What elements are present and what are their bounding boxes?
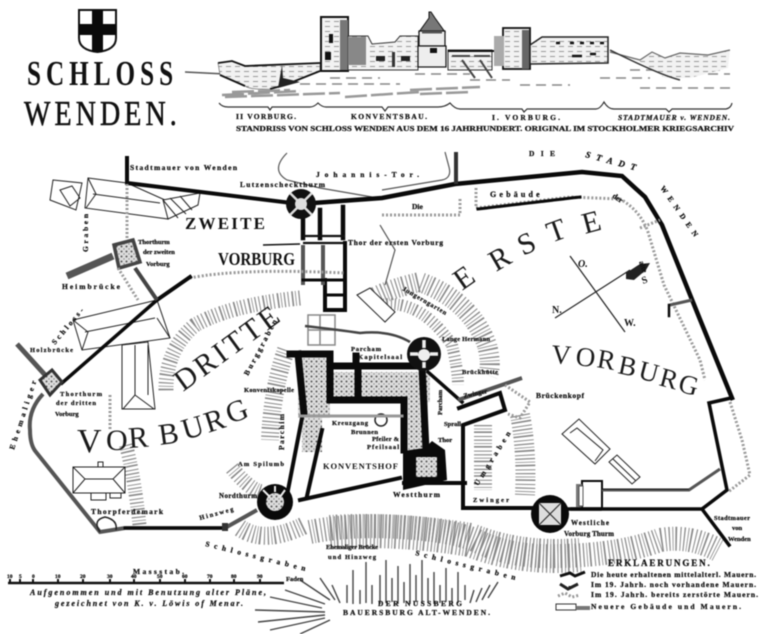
text block: map labels: Parcham — [437, 389, 444, 415]
text block: map labels — [7, 149, 751, 617]
castle west tower block — [403, 441, 447, 490]
title: WENDEN. — [24, 94, 177, 133]
text block: map labels: Schloss- — [50, 306, 86, 346]
icon: tower east — [531, 495, 569, 533]
panel: convent castle — [288, 326, 532, 508]
scale numbers: 90 — [257, 574, 263, 580]
heading: Vorburg right: V — [551, 339, 573, 370]
panel: third outer bailey wall — [17, 240, 257, 532]
icon: coat of arms shield — [79, 10, 116, 52]
text block: map labels: Zwinger — [473, 497, 509, 504]
castle fountain — [375, 414, 387, 426]
text block: map labels: Vorburg Thurm — [564, 530, 614, 538]
icon: tower south-west — [257, 484, 293, 520]
text block: map labels: Westthurm — [393, 490, 441, 499]
text block: map labels: Jungerngarten — [401, 286, 448, 317]
heading: Erste: E — [447, 259, 481, 297]
elevation gate tower — [494, 28, 530, 69]
elevation ground and hills — [185, 50, 730, 97]
elevation long curtain wall — [530, 37, 608, 64]
elevation connecting wall — [448, 50, 495, 78]
heading: Vorburg right: U — [635, 355, 662, 389]
scale numbers: 40 — [131, 574, 137, 580]
heading: Dritte: DRITTE — [168, 299, 286, 398]
heading: Vorburg left: R — [127, 421, 149, 455]
text block: map labels: Ehemaliger — [7, 379, 38, 451]
heading: Erste: R — [483, 239, 517, 278]
building: east house — [562, 419, 610, 464]
heading: Vorburg left: V — [77, 423, 102, 460]
text block: map labels: Konventskapelle — [244, 387, 294, 394]
text block: map labels: Thorpferdemark — [91, 507, 164, 516]
text block: map labels: Hinzweg — [199, 506, 235, 522]
wall south-east spur — [569, 507, 600, 511]
text block: map labels: Pfeiler & — [372, 436, 400, 443]
panel: outer town wall — [127, 152, 750, 545]
text block: map labels: Westliche — [571, 519, 609, 527]
panel: buildings — [50, 178, 640, 507]
text block: map labels: Kreuzgang — [332, 420, 369, 427]
scale numbers: 80 — [231, 574, 237, 580]
scale numbers: 5 — [19, 574, 22, 580]
heading: Erste — [447, 204, 605, 297]
scale numbers: 50 — [157, 574, 163, 580]
legend title: ERKLAERUNGEN. — [608, 558, 710, 568]
text block: map labels: der — [611, 191, 625, 205]
heading: Vorburg left: U — [178, 409, 208, 447]
text block: map labels: WENDEN — [658, 184, 700, 239]
icon: tower north-east — [407, 337, 441, 371]
heading: Vorburg left: O — [106, 424, 128, 457]
text block: map labels: Graben — [81, 213, 90, 252]
scale numbers: 10 — [55, 574, 61, 580]
building: vertical roof — [122, 342, 155, 409]
panel: scale bar — [7, 567, 304, 583]
icon: compass rose: S — [640, 274, 650, 287]
text block: map labels: Brückhütte — [462, 369, 498, 376]
text block: map labels: Sprall- — [444, 421, 463, 428]
heading: Erste: E — [578, 204, 605, 241]
text block: map labels: Heimbrücke — [62, 282, 121, 291]
icon: compass rose: N. — [552, 305, 562, 316]
panel: scale bar: Massstab. — [133, 567, 184, 576]
text block: map labels: Stadtmauer — [714, 515, 750, 522]
title — [24, 54, 177, 133]
heading: Vorburg right: B — [616, 350, 640, 383]
castle west walls — [288, 416, 465, 500]
hachures: Nussberg fan — [255, 578, 340, 634]
text block: map labels: Brückenkopf — [536, 391, 584, 400]
text block: map labels: Thorthurm — [138, 239, 170, 246]
heading: Vorburg right — [551, 339, 702, 402]
scale numbers: 20 — [80, 574, 86, 580]
scale numbers: 70 — [207, 574, 213, 580]
heading: Vorburg left: G — [221, 392, 253, 431]
text block: map labels: DER NUSSBERG — [378, 599, 462, 608]
building: east gate block — [576, 481, 602, 507]
heading: Vorburg right: G — [675, 368, 702, 402]
legend row: destroyed walls: Im 19. Jahrh. bereits zerstörte Mauern. — [591, 590, 758, 599]
heading: Vorburg left: R — [200, 402, 229, 440]
icon: compass rose — [552, 256, 650, 332]
text block: map labels: Umgraben — [472, 429, 513, 487]
panel: castle elevation view — [185, 12, 735, 133]
text block: map labels: Ehemaliger Brücke — [326, 544, 378, 551]
panel: legend — [556, 558, 758, 611]
heading: Vorburg upper: VORBURG — [218, 249, 295, 269]
scale numbers: 0 — [32, 574, 35, 580]
panel: gate structure second outer bailey — [190, 207, 395, 345]
elevation section labels: STADTMAUER v. WENDEN. — [618, 113, 730, 122]
elevation section labels: KONVENTSBAU. — [351, 112, 427, 121]
castle east outworks — [428, 372, 532, 508]
text block: map labels: Parcham — [351, 346, 382, 353]
scale numbers: 10 — [7, 574, 13, 580]
text block: map labels: und Hinzweg — [328, 554, 377, 561]
text block: map labels: Johannis-Tor. — [316, 170, 421, 179]
text block: map labels: Schlossgraben — [415, 548, 519, 582]
panel: hachured ditches — [126, 152, 718, 634]
text block: map labels: Zwinger — [463, 388, 488, 400]
text block: map labels: Lutzenscheckthurm — [240, 180, 326, 189]
text block: map labels: Thor der ersten Vorburg — [348, 238, 443, 247]
elevation round tower — [418, 12, 446, 67]
text block: map labels: Vorburg — [55, 411, 79, 418]
text block: map labels: Gebäude — [490, 190, 540, 199]
heading: Erste: S — [512, 225, 541, 262]
text block: map labels: alte — [637, 260, 650, 274]
heading: Vorburg left — [77, 392, 253, 460]
panel: scale bar: Faden — [286, 576, 304, 583]
heading: Zweite: ZWEITE — [185, 214, 265, 233]
icon: compass rose: O. — [578, 259, 588, 270]
hachures: Nussberg hill — [347, 560, 498, 604]
text block: map labels: Die — [412, 202, 424, 211]
elevation square keep — [321, 17, 348, 71]
heading: Vorburg left: B — [156, 416, 181, 452]
text block: map labels: Schlossgraben — [205, 539, 309, 573]
text block: map labels: Thor — [438, 437, 452, 444]
heading: Vorburg right: R — [656, 362, 682, 395]
icon: compass rose: W. — [624, 318, 636, 329]
text block: map labels: Wenden — [728, 536, 751, 543]
elevation section labels: I. VORBURG. — [492, 113, 560, 122]
heading: Erste: T — [542, 212, 571, 250]
text block: map labels: STADT — [584, 149, 638, 173]
castle thick walls — [290, 354, 426, 450]
heading: Konventshof: KONVENTSHOF — [323, 461, 398, 471]
text block: map labels: DIE — [529, 149, 555, 158]
heading: Vorburg right: O — [574, 341, 597, 373]
heading: Vorburg right: R — [595, 343, 618, 376]
text block: map labels: Brunnen — [351, 429, 378, 436]
legend row: new buildings: Neuere Gebäude und Mauern. — [591, 602, 741, 611]
text block: map labels: Lange Hermann — [442, 336, 490, 343]
text block: map labels: Burggraben — [242, 317, 279, 377]
building: south-west house — [73, 462, 125, 500]
text block: survey credit: Aufgenommen und mit Benutzung alter Pläne, — [29, 588, 266, 597]
text block: map labels: Nordthurm — [219, 492, 257, 500]
text block: map labels: Holzbrücke — [30, 347, 73, 354]
text block: map labels: Am Spilumb — [238, 461, 284, 468]
text block: map labels: Vorburg — [146, 261, 170, 268]
elevation caption: STANDRISS VON SCHLOSS WENDEN AUS DEM 16 JAHRHUNDERT. ORIGINAL IM STOCKHOLMER KRIEGSARCHIV — [236, 124, 735, 133]
text block: map labels: BAUERSBURG ALT-WENDEN. — [343, 608, 490, 617]
text block: map labels: Stadtmauer von Wenden — [130, 163, 238, 172]
scale numbers: 60 — [182, 574, 188, 580]
elevation section labels: II VORBURG. — [236, 112, 296, 121]
text block: survey credit: gezeichnet von K. v. Löwis of Menar. — [54, 599, 243, 608]
text block: map labels: von — [732, 525, 742, 532]
elevation convent buildings — [348, 36, 418, 70]
building: west long roof — [73, 300, 170, 350]
legend row: existing 19c: Im 19. Jahrh. noch vorhandene Mauern. — [591, 580, 756, 589]
legend row: preserved walls: Die heute erhaltenen mittelalterl. Mauern. — [591, 570, 756, 579]
elevation section labels — [236, 112, 730, 122]
text block: map labels: der dritten — [56, 400, 96, 407]
icon: tower north gate — [286, 189, 316, 219]
elevation brackets — [219, 102, 732, 112]
scale numbers: 30 — [107, 574, 113, 580]
building: east shed — [609, 455, 640, 484]
building: north-west long roofs — [50, 178, 200, 219]
title: SCHLOSS — [27, 54, 173, 93]
text block: survey credit — [29, 588, 266, 608]
castle stippled rooms — [298, 356, 430, 452]
text block: map labels: Pfeilsaal — [367, 444, 399, 451]
text block: map labels: Kapitelsaal — [358, 354, 402, 361]
text block: map labels: der zweiten — [143, 249, 175, 256]
text block: map labels: Thorthurm — [60, 391, 103, 398]
text block: map labels: Parchim — [277, 413, 286, 450]
